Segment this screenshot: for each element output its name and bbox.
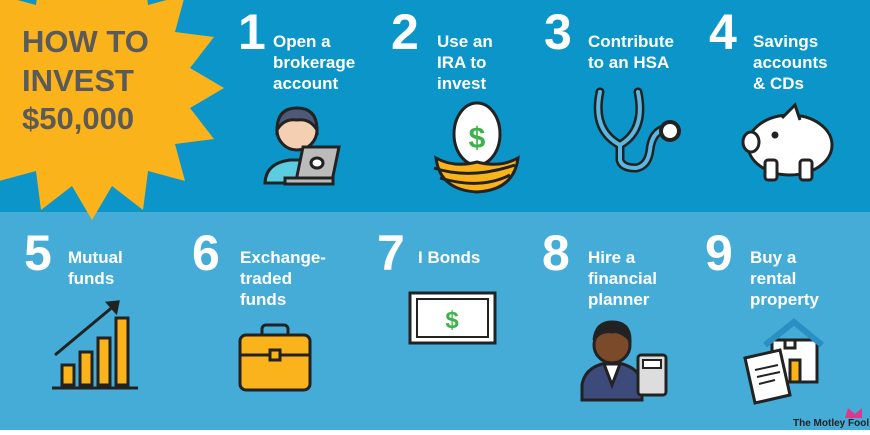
item 6: Exchange- [240, 248, 326, 267]
top band [0, 0, 870, 212]
item 1 [238, 4, 355, 93]
item 9: property [750, 290, 820, 309]
item 2: invest [437, 74, 486, 93]
item 8: planner [588, 290, 650, 309]
item 5: Mutual [68, 248, 123, 267]
item 7: 7 [377, 225, 405, 281]
item 3: 3 [544, 4, 572, 60]
item 3 [544, 4, 674, 72]
icon: stethoscope [598, 92, 679, 168]
starburst title: INVEST [22, 63, 134, 98]
item 5: funds [68, 269, 114, 288]
item 3: Contribute [588, 32, 674, 51]
item 7 [377, 225, 480, 281]
item 8: Hire a [588, 248, 636, 267]
item 4: & CDs [753, 74, 804, 93]
item 2 [391, 4, 493, 93]
starburst title: $50,000 [22, 101, 134, 136]
icon: briefcase [240, 325, 310, 390]
icon: piggy bank [743, 105, 832, 180]
item 9: 9 [705, 225, 733, 281]
bottom band [0, 212, 870, 430]
item 9: rental [750, 269, 796, 288]
item 6: 6 [192, 225, 220, 281]
item 9 [705, 225, 820, 309]
icon: bond certificate: $ [445, 307, 459, 334]
icon: financial planner [582, 322, 666, 400]
item 2: Use an [437, 32, 493, 51]
item 7: I Bonds [418, 248, 480, 267]
item 6 [192, 225, 326, 309]
item 9: Buy a [750, 248, 797, 267]
item 6: traded [240, 269, 292, 288]
item 4: accounts [753, 53, 828, 72]
item 1: brokerage [273, 53, 355, 72]
icon: nest egg: $ [469, 122, 486, 155]
item 5: 5 [24, 225, 52, 281]
starburst title: HOW TO [22, 24, 149, 59]
icon: bond certificate [410, 293, 495, 343]
item 2: IRA to [437, 53, 486, 72]
item 3: to an HSA [588, 53, 669, 72]
starburst title [0, 0, 224, 220]
logo: The Motley Fool [793, 408, 869, 429]
item 1: 1 [238, 4, 266, 60]
item 8: 8 [542, 225, 570, 281]
item 8 [542, 225, 657, 309]
item 6: funds [240, 290, 286, 309]
item 2: 2 [391, 4, 419, 60]
item 8: financial [588, 269, 657, 288]
icon: person at laptop [265, 108, 339, 184]
icon: nest egg [434, 103, 518, 192]
logo: The Motley Fool: The Motley Fool [793, 418, 869, 429]
item 5 [24, 225, 123, 288]
item 1: Open a [273, 32, 331, 51]
item 1: account [273, 74, 339, 93]
item 4 [709, 4, 828, 93]
icon: house and deed [745, 322, 822, 403]
item 4: 4 [709, 4, 737, 60]
item 4: Savings [753, 32, 818, 51]
icon: rising bar chart [52, 302, 138, 388]
